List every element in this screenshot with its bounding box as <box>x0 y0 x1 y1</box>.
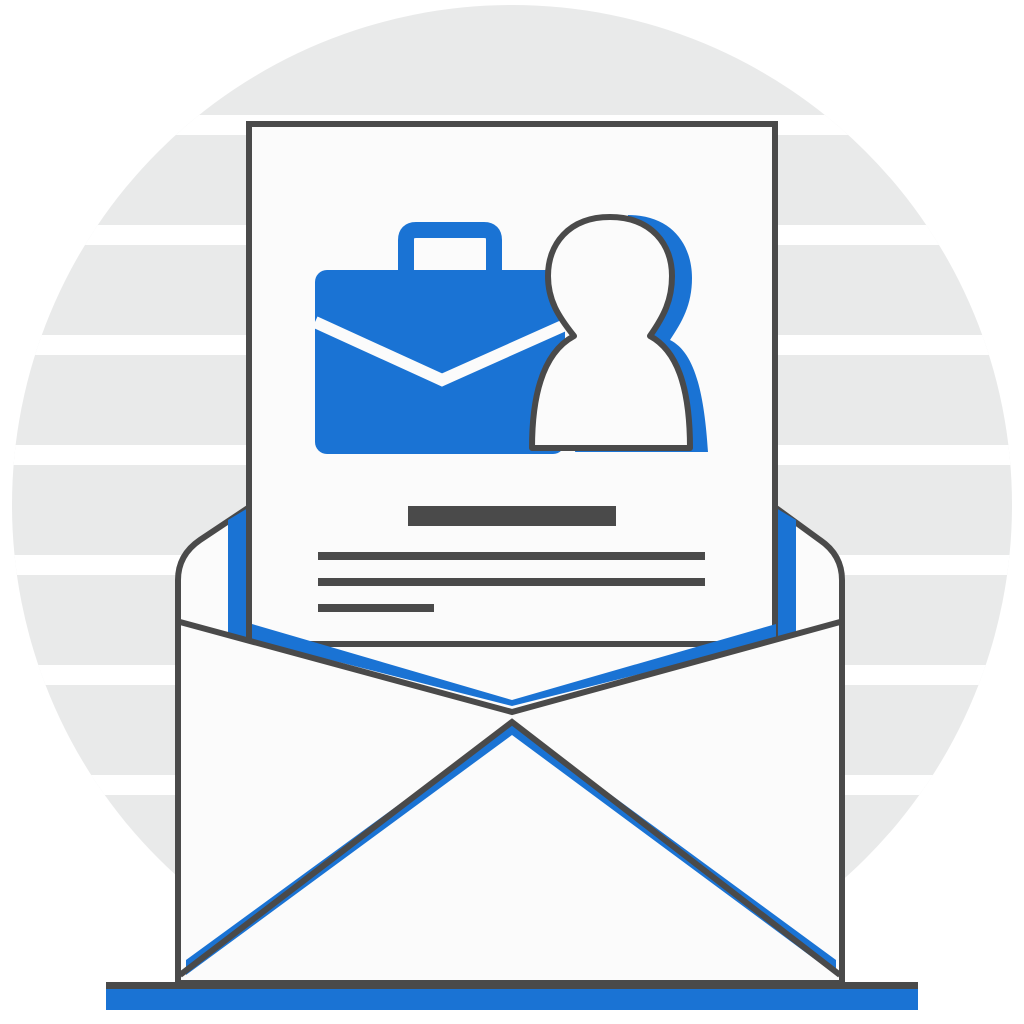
text lines <box>318 506 705 612</box>
envelope front <box>178 622 842 980</box>
paper document <box>249 124 775 644</box>
base line <box>106 982 918 1010</box>
icon: briefcase <box>315 230 565 454</box>
envelope back <box>178 508 842 980</box>
icon: person <box>532 215 708 452</box>
